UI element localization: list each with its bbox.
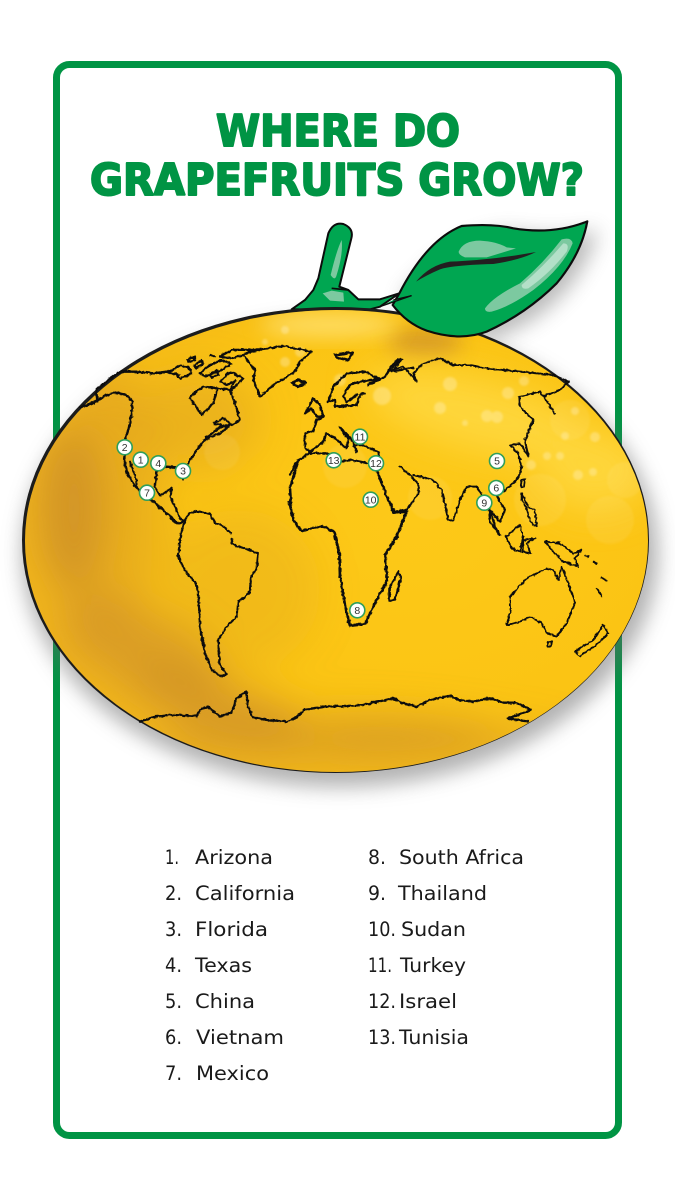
location list: 11. <box>368 954 392 977</box>
marker 6 <box>489 480 504 496</box>
location markers <box>117 429 504 618</box>
Africa north <box>290 462 393 510</box>
location list: 4. <box>165 954 182 977</box>
bokeh <box>262 326 600 480</box>
marker 8: 8 <box>354 605 360 617</box>
title: GRAPEFRUITS GROW? <box>90 155 584 206</box>
location list: South Africa <box>399 846 524 869</box>
marker 2: 2 <box>122 442 128 454</box>
marker 10: 10 <box>365 494 377 506</box>
stem <box>292 224 399 309</box>
shadow: fruit <box>22 319 658 787</box>
marker 13 <box>326 453 341 468</box>
Arctic Canada and Greenland <box>160 346 312 439</box>
marker 11 <box>352 429 368 444</box>
marker 9: 9 <box>481 497 487 509</box>
Asia and Oceania <box>377 358 608 656</box>
marker 1: 1 <box>138 454 144 466</box>
location list: 6. <box>165 1026 182 1049</box>
location list: 12. <box>368 990 396 1013</box>
marker 7: 7 <box>144 487 150 499</box>
location list: Thailand <box>397 882 487 905</box>
location list: 7. <box>165 1062 182 1085</box>
marker 11: 11 <box>355 431 366 443</box>
marker 10 <box>363 492 378 507</box>
fruit <box>22 307 650 773</box>
location list: China <box>195 990 255 1013</box>
marker 2 <box>117 440 132 455</box>
marker 12: 12 <box>370 458 382 470</box>
location list: Israel <box>399 990 457 1013</box>
marker 9 <box>477 495 492 510</box>
marker 1 <box>133 452 148 467</box>
Europe and north Africa <box>290 352 413 475</box>
marker 4: 4 <box>155 458 161 470</box>
marker 5: 5 <box>494 456 500 468</box>
marker 6: 6 <box>493 483 499 495</box>
marker 8 <box>350 603 365 618</box>
location list: 8. <box>368 846 386 869</box>
marker 7 <box>140 485 154 500</box>
location list: Sudan <box>401 918 466 941</box>
fruit shading <box>34 370 570 762</box>
title <box>90 106 584 206</box>
leaf <box>380 221 587 336</box>
location list: 13. <box>368 1026 396 1049</box>
location list: Texas <box>194 954 252 977</box>
marker 13: 13 <box>328 455 340 467</box>
title: WHERE DO <box>216 106 460 157</box>
marker 3 <box>176 464 190 478</box>
location list: 1. <box>165 846 179 869</box>
location list <box>165 846 524 1085</box>
South America, southern Africa, Madagascar, Antarctica <box>140 502 531 722</box>
location list: Mexico <box>196 1062 269 1085</box>
location list: Arizona <box>195 846 273 869</box>
location list: Tunisia <box>398 1026 469 1049</box>
location list: 9. <box>368 882 386 905</box>
location list: 3. <box>165 918 182 941</box>
location list: 5. <box>165 990 182 1013</box>
shadow: leaf <box>400 230 598 340</box>
marker 4 <box>151 456 166 471</box>
location list: Vietnam <box>196 1026 284 1049</box>
location list: Turkey <box>399 954 466 977</box>
location list: 2. <box>165 882 182 905</box>
marker 3: 3 <box>180 466 186 478</box>
location list: California <box>195 882 295 905</box>
marker 12 <box>368 456 384 471</box>
marker 5 <box>490 454 504 468</box>
frame <box>56 64 618 1136</box>
world map <box>80 346 608 722</box>
location list: 10. <box>368 918 396 941</box>
North America <box>80 372 229 523</box>
location list: Florida <box>195 918 268 941</box>
